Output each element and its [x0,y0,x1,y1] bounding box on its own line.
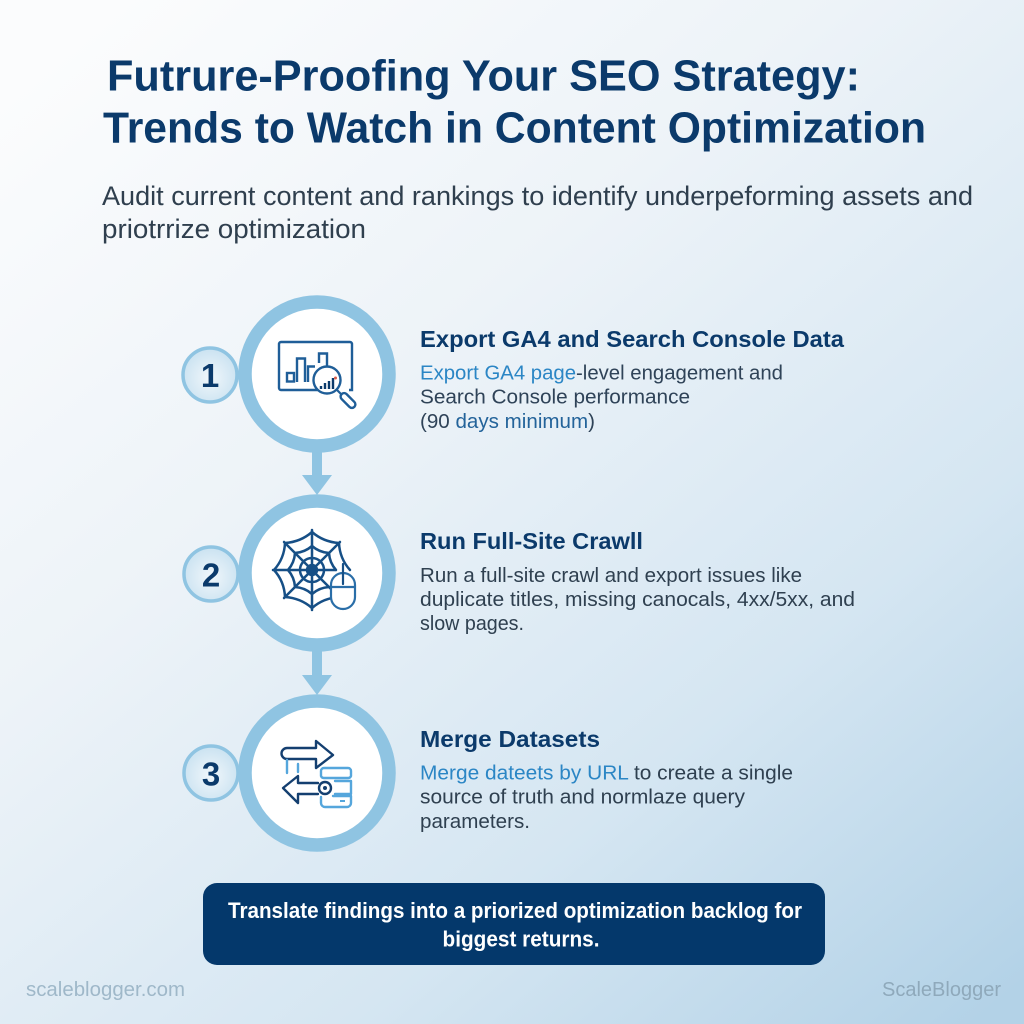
step 3 description [420,762,793,833]
step 3 description: source of truth and normlaze query [420,786,746,808]
step 3 [184,701,793,845]
step 1 number badge [183,348,237,402]
step 1 ring [245,302,389,446]
callout banner [203,883,825,965]
step 2 number badge: 2 [202,556,220,594]
connector arrow 1 to 2 [302,452,332,495]
step 1 [183,302,844,446]
step 1 description [420,362,783,433]
step 2 [184,501,855,645]
step 3 ring [245,701,389,845]
title: Trends to Watch in Content Optimization [103,104,926,152]
title [103,52,926,152]
icon: spider web with mouse [273,530,355,610]
callout banner: biggest returns. [442,926,600,952]
step 2 number badge [184,547,238,601]
step 3 number badge: 3 [202,756,220,792]
connector arrow 2 to 3 [302,651,332,695]
subtitle [102,181,973,244]
title: Futrure-Proofing Your SEO Strategy: [107,52,860,100]
step 2 description: Run a full-site crawl and export issues like [420,564,802,587]
step 1 description: (90 days minimum) [420,410,595,433]
subtitle: priotrrize optimization [102,214,366,244]
step 2 ring [245,501,389,645]
step 3 description: parameters. [420,810,530,833]
step 1 number badge: 1 [201,357,219,394]
step 1 description: Export GA4 page-level engagement and [420,362,783,384]
step 2 description: duplicate titles, missing canocals, 4xx/5xx, and [420,588,855,611]
footer: website: scaleblogger.com [26,979,185,1001]
step 3 number badge [184,746,238,800]
callout banner: Translate findings into a priorized optimization backlog for [228,898,802,923]
step 2 description: slow pages. [420,612,524,635]
footer: brand: ScaleBlogger [882,979,1001,1001]
step 1 heading: Export GA4 and Search Console Data [420,326,844,352]
icon: analytics chart with magnifier [279,342,357,409]
step 3 heading: Merge Datasets [420,726,600,752]
step 2 description [420,564,855,635]
step 2 heading: Run Full-Site Crawll [420,528,643,554]
subtitle: Audit current content and rankings to identify underpeforming assets and [102,181,973,211]
mouse [331,564,355,609]
step 3 description: Merge dateets by URL to create a single [420,762,793,784]
icon: merge arrows with database [282,741,351,807]
step 1 description: Search Console performance [420,386,690,408]
